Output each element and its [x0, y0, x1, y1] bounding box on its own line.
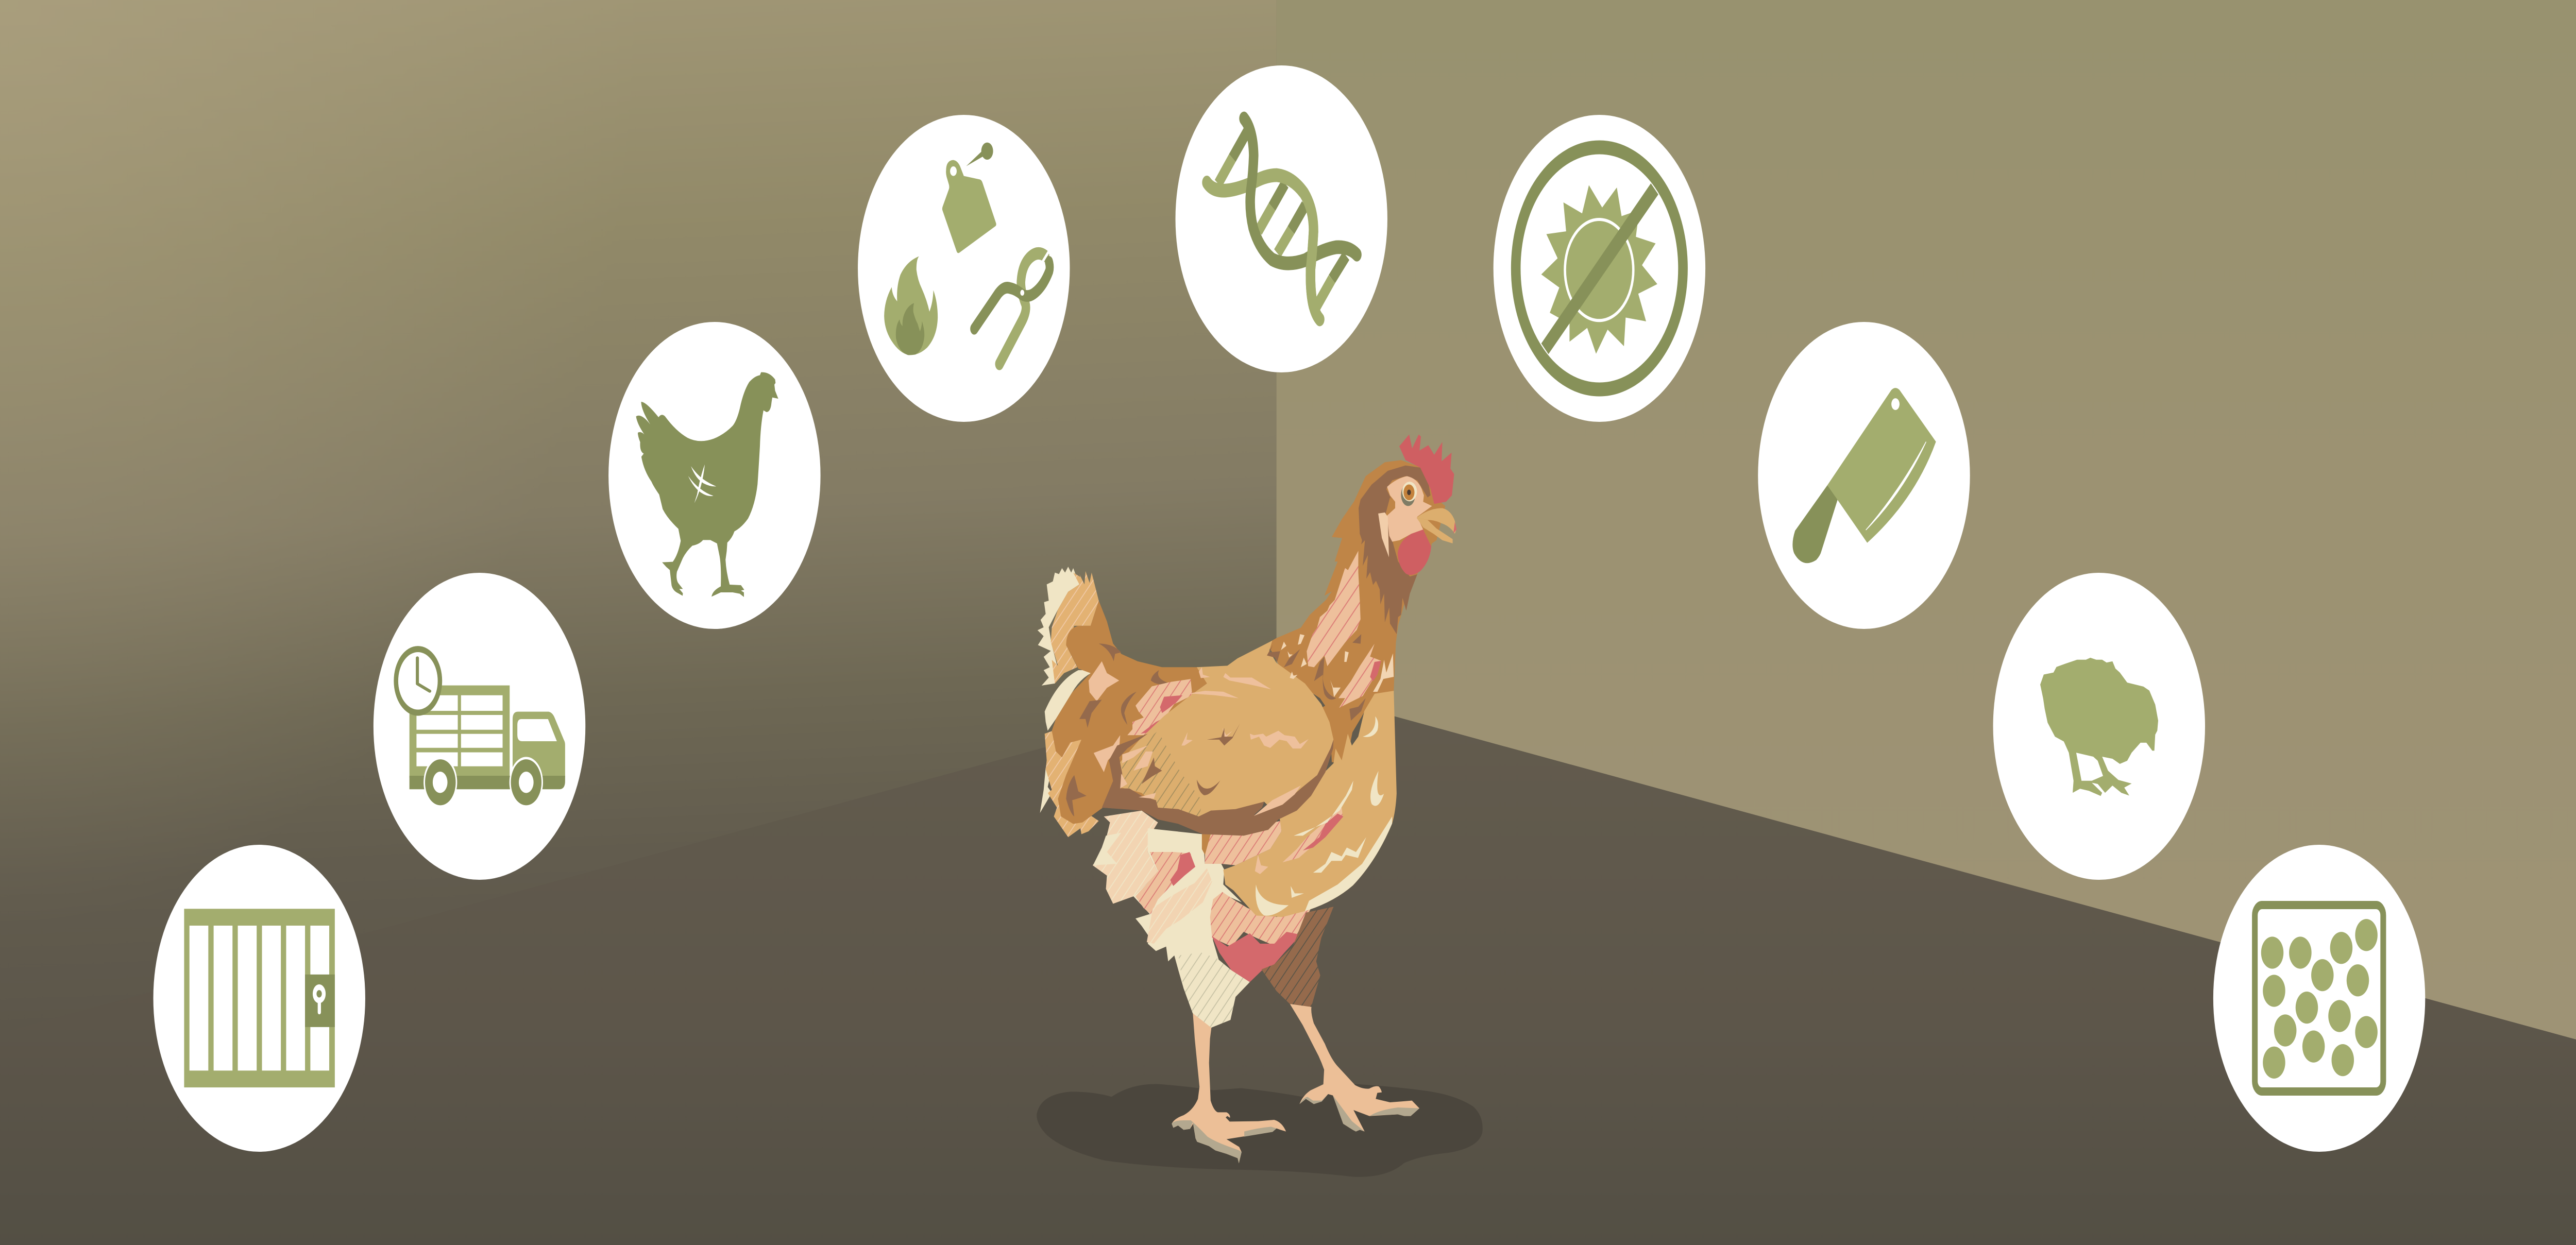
icon: chick silhouette	[1993, 573, 2205, 880]
head brown plumage	[1359, 466, 1431, 634]
icon: cleaver	[1758, 322, 1970, 629]
eye	[1401, 482, 1417, 506]
floor	[0, 684, 2576, 1245]
wattle	[1398, 530, 1431, 575]
ear patch	[1378, 513, 1389, 557]
icon: no sunlight sign	[1494, 115, 1705, 422]
neck feather marks	[1267, 634, 1366, 721]
hen underbelly	[1093, 811, 1333, 1028]
hen legs and feet	[1172, 1003, 1419, 1163]
icon: hen silhouette with scratches	[608, 322, 821, 629]
icon: truck and clock	[374, 573, 585, 880]
beak	[1416, 508, 1456, 543]
right wall	[1277, 0, 2576, 1039]
icon: ear tag, flame and pliers	[858, 115, 1070, 422]
hen wing	[1102, 641, 1333, 835]
small cream feathers	[1281, 634, 1349, 697]
under-beak orange	[1423, 530, 1436, 547]
comb	[1399, 435, 1454, 504]
hen neck feathers and head	[1267, 435, 1456, 737]
icon: cage with lock	[154, 845, 365, 1152]
icon: crowded box of eggs	[2213, 845, 2425, 1152]
hen illustration	[1038, 435, 1456, 1163]
orange cheek	[1385, 498, 1395, 517]
hen tail and rear body	[1038, 567, 1207, 837]
left wall	[0, 0, 1277, 1033]
neck bare patches	[1307, 551, 1394, 708]
icon: DNA helix	[1176, 65, 1387, 372]
floor shadow under hen	[1037, 1084, 1483, 1177]
face skin	[1387, 476, 1432, 542]
hen neck base	[1267, 460, 1445, 762]
hen breast	[1223, 691, 1397, 917]
